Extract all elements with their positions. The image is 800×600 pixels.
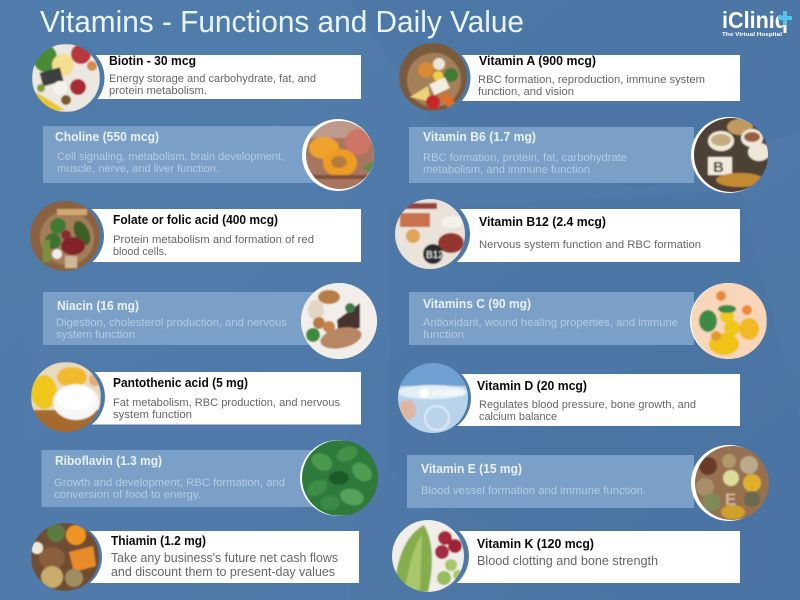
panel: Pantothenic acid: system function <box>113 409 192 421</box>
icon: pantothenic foods <box>31 362 101 432</box>
icon: vitamin E seeds <box>692 445 770 521</box>
icon: vitamin D sky <box>397 362 469 434</box>
panel: Vitamin A <box>399 43 740 112</box>
panel: Folate: Protein metabolism and formation of red <box>113 234 314 246</box>
panel: Niacin: Digestion, cholesterol production, and nervous <box>56 317 288 329</box>
panel: Vitamin D: Regulates blood pressure, bone growth, and <box>479 399 696 411</box>
panel: Vitamin B12: Nervous system function and RBC formation <box>479 239 701 251</box>
text: Vitamin E: Vitamin E (15 mg) <box>421 462 522 476</box>
text: Vitamin D: Vitamin D (20 mcg) <box>477 379 587 393</box>
text: Vitamin A: Vitamin A (900 mcg) <box>479 54 596 68</box>
icon: vitamin E seeds: E <box>725 490 736 509</box>
panel: Riboflavin: conversion of food to energy. <box>54 489 201 501</box>
icon: vitamin A foods <box>399 43 467 111</box>
panel: Niacin: system function <box>56 329 135 341</box>
panel: Pantothenic acid: Fat metabolism, RBC production, and nervous <box>113 397 341 409</box>
panel: Vitamin D: calcium balance <box>479 411 557 423</box>
text: Vitamins C: Vitamins C (90 mg) <box>423 297 531 311</box>
panel: Choline: muscle, nerve, and liver function. <box>57 163 219 175</box>
icon: green leaves <box>301 440 379 516</box>
panel: Vitamin B6 <box>409 117 770 193</box>
text: Riboflavin: Riboflavin (1.3 mg) <box>55 454 162 468</box>
logo: iCliniq: iCliniq <box>722 7 788 33</box>
icon: vitamin C foods <box>691 283 767 359</box>
text: Vitamin K: Vitamin K (120 mcg) <box>477 537 594 551</box>
panel: Vitamins C <box>409 283 767 359</box>
panel: Vitamins C: Antioxidant, wound healing properties, and immune <box>423 317 678 329</box>
panel: Thiamin: Take any business's future net cash flows <box>111 551 338 565</box>
icon: vitamin B6 foods: B <box>713 159 724 176</box>
logo: iCliniq: The Virtual Hospital <box>722 32 783 38</box>
text: Vitamin B12: Vitamin B12 (2.4 mcg) <box>479 215 606 229</box>
text: Biotin: Biotin - 30 mcg <box>109 54 196 68</box>
panel: Biotin: protein metabolism. <box>109 85 207 97</box>
title: Vitamins - Functions and Daily Value <box>40 4 524 39</box>
icon: vitamin K greens <box>391 519 465 593</box>
panel: Niacin <box>43 283 377 359</box>
panel: Vitamin A: function, and vision <box>478 86 574 98</box>
icon: vitamin D sky: VITAMIN <box>431 389 464 398</box>
panel: Biotin: Energy storage and carbohydrate, fat, and <box>109 73 316 85</box>
panel: Vitamin K <box>391 519 740 593</box>
panel: Folate <box>30 200 361 272</box>
icon: niacin foods <box>301 283 377 359</box>
panel: Vitamin A: RBC formation, reproduction, immune system <box>478 74 705 86</box>
panel: Vitamin B6: metabolism, and immune function <box>423 164 590 176</box>
panel: Riboflavin: Growth and development, RBC formation, and <box>54 477 285 489</box>
panel: Pantothenic acid <box>31 362 361 432</box>
panel: Vitamin K: Blood clotting and bone strength <box>477 554 658 568</box>
panel: Choline: Cell signaling, metabolism, brain development, <box>57 151 284 163</box>
panel: Vitamin B6: RBC formation, protein, fat, carbohydrate <box>423 152 627 164</box>
text: Niacin: Niacin (16 mg) <box>57 299 139 313</box>
text: Thiamin: Thiamin (1.2 mg) <box>111 534 206 548</box>
panel: Vitamin B12 <box>394 198 740 270</box>
panel: Thiamin: and discount them to present-day values <box>111 565 335 579</box>
panel: Choline <box>43 119 378 191</box>
panel: Vitamins C: function <box>423 329 464 341</box>
text: Folate: Folate or folic acid (400 mcg) <box>113 213 278 227</box>
panel: Riboflavin <box>42 440 379 516</box>
icon: apricots <box>306 121 374 189</box>
text: Vitamin B6: Vitamin B6 (1.7 mg) <box>423 130 536 144</box>
icon: vitamin B6 foods <box>692 117 770 193</box>
panel: Vitamin E: Blood vessel formation and immune function. <box>421 485 646 497</box>
panel: Thiamin <box>31 523 359 591</box>
icon: folate foods <box>30 200 100 272</box>
panel: Folate: blood cells. <box>113 246 167 258</box>
panel: Biotin <box>32 44 361 112</box>
text: Choline: Choline (550 mcg) <box>55 130 159 144</box>
icon: biotin foods <box>32 44 100 112</box>
panel: Vitamin E <box>407 445 770 521</box>
icon: vitamin B12 foods <box>394 198 466 270</box>
text: Pantothenic acid: Pantothenic acid (5 mg) <box>113 376 248 390</box>
icon: thiamin foods <box>31 523 99 591</box>
panel: Vitamin D <box>397 362 740 434</box>
icon: vitamin B12 foods: B12 <box>426 250 444 261</box>
